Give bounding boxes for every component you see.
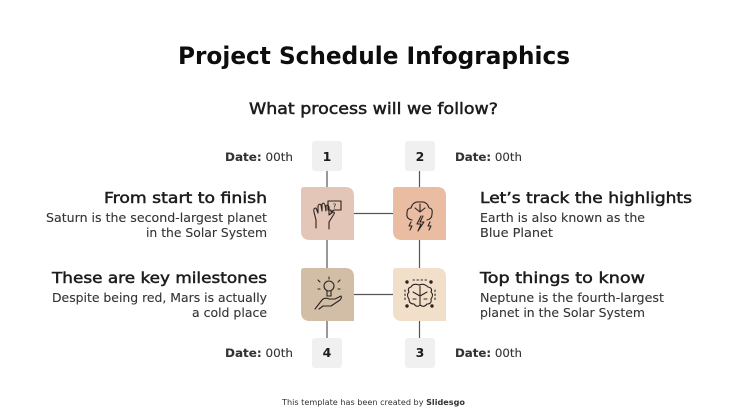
- description 1: [46, 211, 267, 240]
- panel: step 4: [51, 268, 354, 368]
- number box 4: 4: [323, 345, 332, 360]
- description 1: in the Solar System: [146, 226, 267, 240]
- panel: step 1: [46, 141, 354, 240]
- heading 1: From start to finish: [104, 189, 267, 207]
- date label 2: Date: 00th: [455, 150, 522, 164]
- description 4: [52, 291, 267, 320]
- heading 4: These are key milestones: [51, 269, 267, 287]
- description 2: Blue Planet: [480, 226, 553, 240]
- description 3: [480, 291, 664, 320]
- number box 1: 1: [323, 149, 331, 164]
- description 3: Neptune is the fourth-largest: [480, 291, 664, 305]
- date label 1: Date: 00th: [225, 150, 293, 164]
- date label 3: Date: 00th: [455, 346, 522, 360]
- description 2: [480, 211, 645, 240]
- description 3: planet in the Solar System: [480, 306, 645, 320]
- panel: step 3: [393, 268, 664, 368]
- number box 2: 2: [416, 149, 424, 164]
- icon tile 3: brain with dots: [393, 268, 446, 321]
- number box 3: 3: [416, 345, 424, 360]
- number box 1: [312, 141, 342, 171]
- number box 2: [405, 141, 435, 171]
- date label 4: Date: 00th: [225, 346, 293, 360]
- icon tile 2: storm brain cloud: [393, 187, 446, 240]
- heading 2: Let’s track the highlights: [480, 189, 692, 207]
- description 4: a cold place: [192, 306, 267, 320]
- heading 3: Top things to know: [479, 269, 645, 287]
- icon tile 4: hand with light bulb: [301, 268, 354, 321]
- panel: step 2: [393, 141, 692, 240]
- subtitle: What process will we follow?: [249, 99, 498, 118]
- icon tile 1: hand with question: [301, 187, 354, 240]
- description 1: Saturn is the second-largest planet: [46, 211, 267, 225]
- number box 4: [312, 338, 342, 368]
- description 4: Despite being red, Mars is actually: [52, 291, 267, 305]
- description 2: Earth is also known as the: [480, 211, 645, 225]
- connector lines: [327, 171, 420, 338]
- title: Project Schedule Infographics: [178, 42, 570, 70]
- footer credit: This template has been created by Slidesgo: [281, 398, 465, 407]
- icon tile 1: hand with question: ?: [333, 202, 337, 210]
- number box 3: [405, 338, 435, 368]
